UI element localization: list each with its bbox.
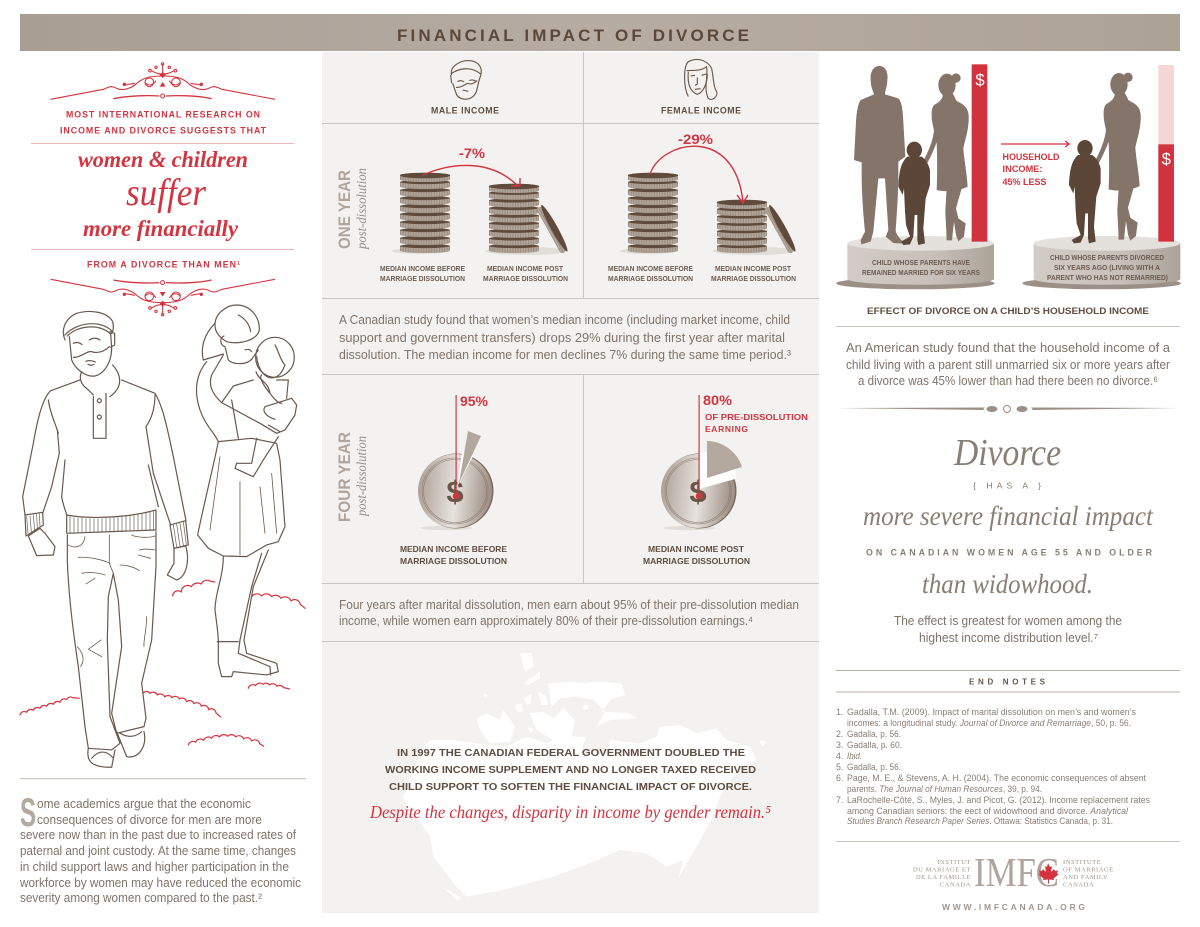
- panel: end notes: 3.: [836, 740, 843, 750]
- chart: male coin stacks: MEDIAN INCOME POST: [487, 264, 564, 273]
- chart: female coin stacks: MARRIAGE DISSOLUTION: [711, 274, 796, 283]
- logo: IMFC: CANADA: [1063, 882, 1094, 888]
- text block: four year finding: income, while women earn approximately 80% of their pre-dissolution earnings.⁴: [339, 614, 753, 628]
- label: female income: FEMALE INCOME: [661, 106, 741, 116]
- callout: widowhood comparison: [863, 432, 1154, 645]
- chart: female coin 80%: EARNING: [705, 424, 748, 434]
- label: four year post-dissolution: post-dissolution: [355, 436, 370, 517]
- label: divorced pedestal text: [1047, 253, 1169, 282]
- ornament: divider: [836, 406, 1180, 412]
- text block: 1997 federal change: Despite the changes, disparity in income by gender remain.⁵: [369, 802, 771, 822]
- text block: 1997 federal change: CHILD SUPPORT TO SOFTEN THE FINANCIAL IMPACT OF DIVORCE.: [389, 781, 752, 793]
- chart: household income silhouettes: $: [975, 71, 985, 90]
- chart: male coin stacks: MARRIAGE DISSOLUTION: [483, 274, 568, 283]
- panel: end notes: 7.: [836, 795, 843, 805]
- man figure: [23, 311, 188, 767]
- chart: female coin stacks: MEDIAN INCOME POST: [715, 264, 792, 273]
- panel: end notes: 6.: [836, 773, 843, 783]
- text block: left paragraph: consequences of divorce for men are more: [37, 813, 262, 827]
- logo: IMFC: AND FAMILY: [1063, 874, 1108, 881]
- logo: IMFC: DU MARIAGE ET: [913, 866, 971, 874]
- logo: IMFC: DE LA FAMILLE: [916, 874, 971, 881]
- panel: left headline: MOST INTERNATIONAL RESEARCH ON: [66, 110, 260, 120]
- chart: female coin 80%: MEDIAN INCOME POST: [648, 544, 745, 554]
- callout: widowhood comparison: than widowhood.: [922, 569, 1093, 599]
- chart: female coin stacks: -29%: [678, 131, 714, 147]
- text block: left paragraph: severe now than in the past due to increased rates of: [20, 828, 296, 842]
- pedestal: married: [836, 236, 995, 289]
- text block: one year finding: [339, 313, 791, 362]
- text block: four year finding: [339, 598, 799, 628]
- arrow: -29%: [650, 146, 748, 203]
- panel: end notes: LaRochelle-Côté, S., Myles, J. and Picot, G. (2012). Income replacement rates: [847, 795, 1151, 805]
- logo: IMFC: IMFC: [974, 849, 1059, 895]
- text block: left paragraph: workforce by women may have reduced the economic: [19, 876, 301, 890]
- text block: left paragraph: paternal and joint custody. At the same time, changes: [20, 844, 296, 858]
- ornament: top flourish: [51, 63, 275, 99]
- text block: one year finding: support and government transfers) drops 29% during the first year after marital: [339, 331, 785, 345]
- label: married pedestal text: [862, 258, 980, 277]
- woman and baby figure: [197, 305, 297, 677]
- ornament: bottom flourish: [51, 279, 275, 316]
- label: one year post-dissolution: ONE YEAR: [335, 170, 354, 249]
- text block: 1997 federal change: WORKING INCOME SUPPLEMENT AND NO LONGER TAXED RECEIVED: [385, 764, 756, 776]
- arrow: -7%: [423, 165, 520, 186]
- panel: end notes: END NOTES: [969, 678, 1046, 686]
- text block: left paragraph: S: [20, 791, 36, 835]
- label: divorced pedestal text: PARENT WHO HAS NOT REMARRIED): [1047, 273, 1169, 282]
- callout: household income 45% less: 45% LESS: [1002, 177, 1046, 188]
- chart: female coin 80%: MARRIAGE DISSOLUTION: [643, 556, 750, 566]
- logo: IMFC: INSTITUT: [937, 859, 971, 866]
- illustration: man and woman with baby: [20, 305, 305, 767]
- heading: effect of divorce: EFFECT OF DIVORCE ON A CHILD’S HOUSEHOLD INCOME: [867, 306, 1149, 316]
- panel: end notes: 5.: [836, 762, 843, 772]
- label: four year post-dissolution: FOUR YEAR: [335, 432, 354, 522]
- text block: left paragraph: ome academics argue that the economic: [37, 797, 251, 811]
- panel: left headline: INCOME AND DIVORCE SUGGESTS THAT: [60, 126, 267, 136]
- chart: female coin stacks: [608, 131, 798, 283]
- label: married pedestal text: REMAINED MARRIED FOR SIX YEARS: [862, 268, 980, 277]
- chart: male coin stacks: MEDIAN INCOME BEFORE: [380, 264, 465, 273]
- red grass mounds: [20, 580, 305, 746]
- chart: male coin 95%: [400, 394, 507, 566]
- callout: widowhood comparison: highest income distribution level.⁷: [919, 631, 1098, 645]
- pedestal: divorced: [1022, 236, 1181, 289]
- panel: end notes: Page, M. E., & Stevens, A. H. (2004). The economic consequences of absent: [847, 773, 1147, 783]
- chart: male coin 95%: MEDIAN INCOME BEFORE: [400, 544, 507, 554]
- bar: full income: [972, 64, 987, 242]
- label: four year post-dissolution: [335, 432, 370, 522]
- logo: IMFC: [913, 849, 1114, 895]
- callout: household income 45% less: [1002, 152, 1060, 188]
- text block: 1997 federal change: IN 1997 THE CANADIAN FEDERAL GOVERNMENT DOUBLED THE: [397, 747, 745, 759]
- text block: left paragraph: [19, 778, 306, 905]
- logo: IMFC: INSTITUTE: [1063, 859, 1101, 866]
- text block: left paragraph: severity among women compared to the past.²: [20, 891, 262, 905]
- chart: male coin 95%: MARRIAGE DISSOLUTION: [400, 556, 507, 566]
- title banner: FINANCIAL IMPACT OF DIVORCE: [397, 26, 749, 45]
- panel: left headline: women & children: [78, 147, 248, 172]
- logo: IMFC: OF MARRIAGE: [1063, 866, 1114, 874]
- icon: male face: [451, 61, 481, 99]
- panel: end notes: 2.: [836, 729, 843, 739]
- label: one year post-dissolution: [335, 168, 370, 250]
- silhouette: father: [854, 66, 905, 244]
- callout: widowhood comparison: { HAS A }: [973, 480, 1041, 490]
- panel: end notes: [836, 670, 1180, 842]
- panel: end notes: Gadalla, p. 60.: [847, 740, 902, 750]
- label: divorced pedestal text: CHILD WHOSE PARENTS DIVORCED: [1050, 253, 1164, 262]
- panel: middle background: [322, 52, 819, 913]
- text block: American study: child living with a parent still unmarried six or more years after: [846, 358, 1170, 372]
- callout: household income 45% less: INCOME:: [1002, 164, 1042, 175]
- arrow: to divorced household: [1001, 141, 1069, 147]
- chart: female coin 80%: 80%: [703, 393, 732, 408]
- chart: male coin stacks: -7%: [459, 145, 486, 161]
- text block: American study: An American study found that the household income of a: [846, 341, 1170, 355]
- chart: female coin stacks: MEDIAN INCOME BEFORE: [608, 264, 693, 273]
- chart: household income silhouettes: [836, 64, 1181, 289]
- panel: end notes: among Canadian seniors: the eect of widowhood and divorce. Analytical: [847, 806, 1129, 816]
- chart: female coin 80%: [643, 393, 808, 566]
- panel: end notes: Ibid.: [847, 751, 862, 761]
- chart: male coin 95%: 95%: [460, 394, 488, 409]
- panel: end notes: parents. The Journal of Human Resources, 39, p. 94.: [847, 784, 1042, 794]
- panel: end notes: 1.: [836, 707, 843, 717]
- label: one year post-dissolution: post-dissolution: [355, 168, 370, 250]
- logo: IMFC: CANADA: [940, 882, 971, 888]
- bar: reduced income: $: [1162, 149, 1171, 168]
- text block: left paragraph: in child support laws and higher participation in the: [20, 860, 289, 874]
- chart: male coin stacks: MARRIAGE DISSOLUTION: [380, 274, 465, 283]
- map: Canada silhouette: [403, 653, 765, 900]
- callout: widowhood comparison: more severe financial impact: [863, 501, 1154, 531]
- title banner: [20, 14, 1180, 51]
- text: website: WWW.IMFCANADA.ORG: [942, 902, 1085, 912]
- text block: American study: [846, 341, 1170, 388]
- text block: one year finding: A Canadian study found that women’s median income (including market income, child: [339, 313, 790, 327]
- panel: end notes: Gadalla, p. 56.: [847, 762, 901, 772]
- panel: left headline: FROM A DIVORCE THAN MEN¹: [87, 260, 240, 270]
- panel: end notes: Gadalla, T.M. (2009). Impact of marital dissolution on men’s and women’s: [847, 707, 1137, 717]
- callout: widowhood comparison: Divorce: [953, 432, 1061, 474]
- panel: left headline: [31, 63, 294, 316]
- label: divorced pedestal text: SIX YEARS AGO (LIVING WITH A: [1054, 263, 1160, 272]
- callout: widowhood comparison: ON CANADIAN WOMEN AGE 55 AND OLDER: [866, 548, 1153, 558]
- chart: female coin 80%: OF PRE-DISSOLUTION: [705, 412, 808, 422]
- text block: four year finding: Four years after marital dissolution, men earn about 95% of their pre-dissolution median: [339, 598, 799, 612]
- panel: end notes: Studies Branch Research Paper Series. Ottawa: Statistics Canada, p. 31.: [847, 816, 1113, 826]
- panel: end notes: 4.: [836, 751, 843, 761]
- bar: reduced income: [1158, 65, 1174, 242]
- panel: end notes: incomes: a longitudinal study. Journal of Divorce and Remarriage, 50, p. 56.: [847, 718, 1131, 728]
- label: male income: MALE INCOME: [431, 106, 499, 116]
- icon: maple leaf: [1038, 863, 1058, 884]
- chart: male coin stacks: [380, 145, 570, 283]
- icon: female face: [685, 59, 717, 99]
- chart: female coin stacks: MARRIAGE DISSOLUTION: [608, 274, 693, 283]
- text block: 1997 federal change: [369, 747, 771, 822]
- callout: widowhood comparison: The effect is greatest for women among the: [894, 614, 1122, 628]
- panel: left headline: suffer: [126, 172, 206, 214]
- text block: American study: a divorce was 45% lower than had there been no divorce.⁶: [858, 374, 1158, 388]
- panel: end notes: Gadalla, p. 56.: [847, 729, 901, 739]
- panel: income comparison grid lines: [322, 52, 819, 642]
- label: married pedestal text: CHILD WHOSE PARENTS HAVE: [872, 258, 970, 267]
- callout: household income 45% less: HOUSEHOLD: [1002, 152, 1060, 163]
- text block: one year finding: dissolution. The median income for men declines 7% during the same time period.³: [339, 348, 791, 362]
- panel: left headline: more financially: [83, 216, 239, 241]
